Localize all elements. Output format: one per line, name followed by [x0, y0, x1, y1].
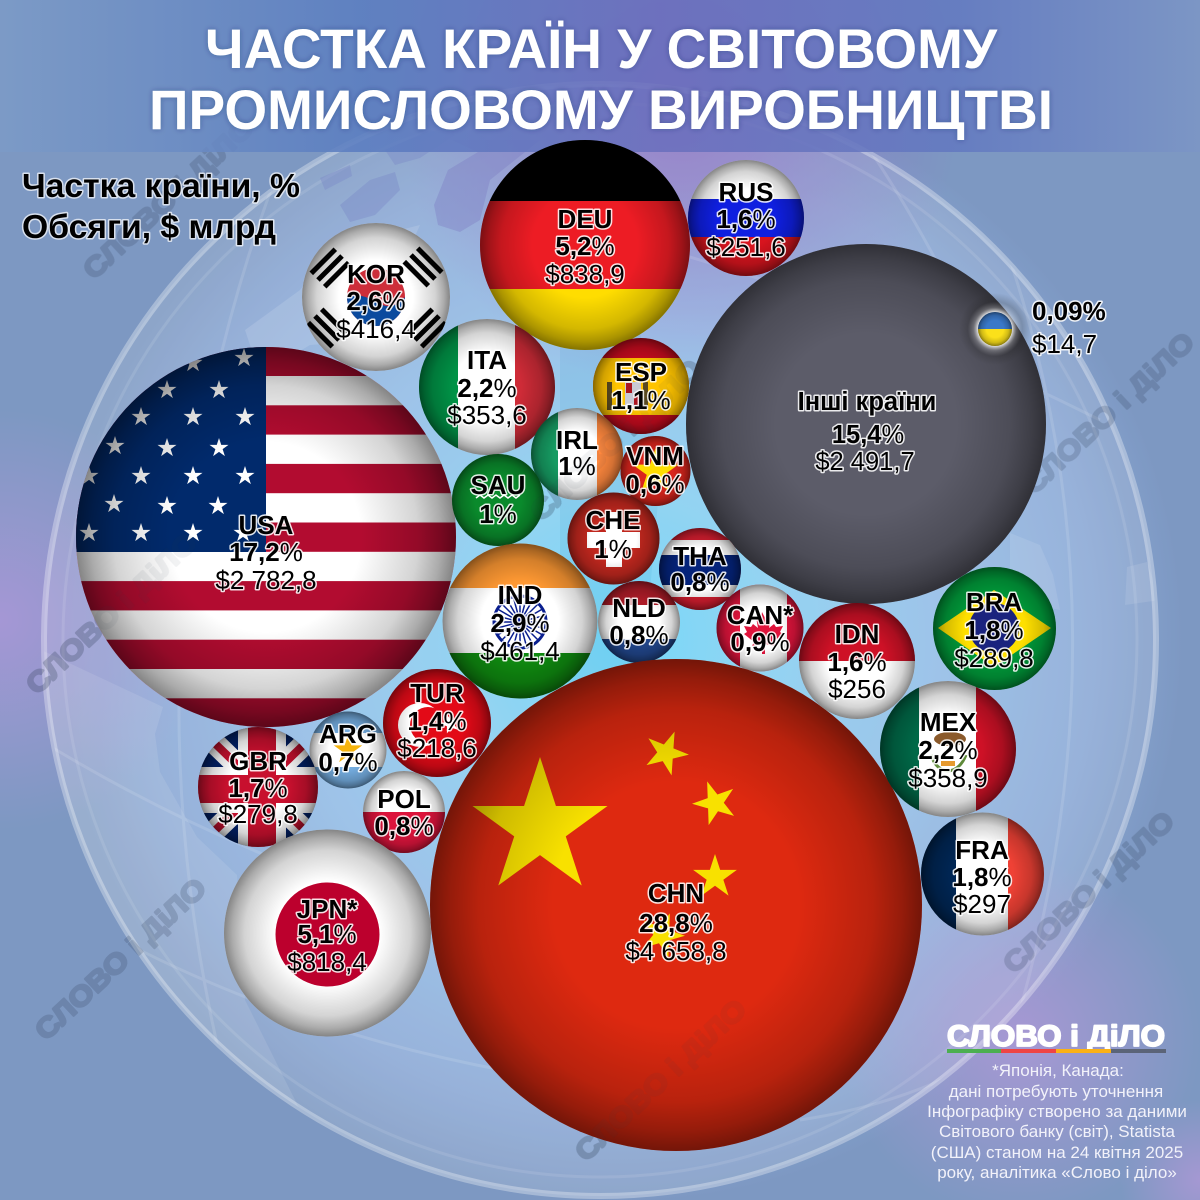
bubble: Thailand — [659, 528, 741, 610]
label: RUS: RUS — [719, 177, 773, 207]
label: MEX: MEX — [920, 707, 977, 737]
label: RUS: 1,6% — [716, 204, 776, 234]
watermarks: СЛОВО і ДіЛО — [997, 805, 1180, 979]
bubble: China — [430, 659, 922, 1151]
footnote and source: року, аналітика «Слово і діло» — [937, 1163, 1177, 1182]
label: IND: IND — [498, 580, 542, 610]
title — [149, 17, 1053, 141]
bubble: Ireland — [531, 408, 624, 500]
watermark overlay on bubbles: СЛОВО і ДіЛО — [524, 353, 707, 527]
label: THA: 0,8% — [670, 567, 730, 597]
label: POL: 0,8% — [374, 811, 434, 841]
label: ITA: $353,6 — [447, 400, 527, 430]
bubble: Mexico — [880, 681, 1016, 817]
label: GBR: $279,8 — [218, 799, 298, 829]
footnote and source: *Японія, Канада: — [992, 1061, 1124, 1080]
watermark overlay on bubbles: СЛОВО і ДіЛО — [569, 993, 752, 1167]
label: USA: 17,2% — [229, 537, 303, 567]
label: BRA: 1,8% — [964, 615, 1024, 645]
bubble: Poland — [363, 771, 445, 854]
label: FRA: FRA — [955, 835, 1009, 865]
label: CHN: $4 658,8 — [625, 936, 727, 966]
bubble: Netherlands — [598, 581, 680, 664]
label: JPN: JPN* — [297, 894, 358, 924]
label: KOR: $416,4 — [336, 314, 416, 344]
logo: Слово і діло: СЛОВО і ДіЛО — [947, 1020, 1165, 1053]
label: NLD: 0,8% — [609, 620, 669, 650]
bubble: Russia — [688, 160, 804, 277]
bubble: France — [921, 812, 1045, 936]
label: THA: THA — [673, 541, 727, 571]
label: TUR: TUR — [410, 678, 464, 708]
label: TUR: 1,4% — [407, 706, 467, 736]
label: TUR: $218,6 — [397, 733, 477, 763]
label: JPN: 5,1% — [297, 919, 357, 949]
header band — [0, 0, 1200, 152]
label: MEX: 2,2% — [918, 735, 978, 765]
label: CHE: CHE — [586, 505, 640, 535]
bubble: South Korea — [302, 223, 450, 371]
label: SAU: SAU — [471, 470, 525, 500]
bubble: Japan — [224, 830, 431, 1036]
bubble: Other countries — [686, 244, 1046, 604]
bubble: USA — [76, 347, 456, 727]
label: ITA: 2,2% — [457, 373, 517, 403]
label: Ukraine: 0,09% — [1032, 296, 1106, 326]
label: IDN: $256 — [828, 674, 886, 704]
label: ESP: 1,1% — [611, 385, 671, 415]
label: CAN: CAN* — [727, 600, 794, 630]
legend: Частка країни, % — [22, 167, 300, 205]
watermarks: СЛОВО і ДіЛО — [524, 353, 707, 527]
label: DEU: $838,9 — [545, 259, 625, 289]
footnote and source: дані потребують уточнення — [949, 1082, 1163, 1101]
label: VNM: VNM — [626, 441, 684, 471]
bubble: Canada — [716, 584, 804, 672]
bubble: Argentina — [309, 711, 388, 790]
bubble: Vietnam — [620, 436, 692, 507]
label: ITA: ITA — [467, 345, 507, 375]
label: CHE: 1% — [594, 534, 632, 564]
label: GBR: GBR — [229, 746, 287, 776]
footnote and source: (США) станом на 24 квітня 2025 — [931, 1143, 1183, 1162]
title: ПРОМИСЛОВОМУ ВИРОБНИЦТВІ — [149, 78, 1053, 141]
label: FRA: $297 — [953, 889, 1011, 919]
label: IDN: 1,6% — [827, 647, 887, 677]
bubble: Switzerland — [567, 492, 660, 585]
label: other countries: 15,4% — [832, 421, 904, 449]
label: IND: 2,9% — [490, 608, 550, 638]
label: JPN: $818,4 — [287, 947, 367, 977]
label: DEU: DEU — [558, 204, 612, 234]
label: SAU: 1% — [479, 499, 517, 529]
footnote and source: Інфографіку створено за даними — [927, 1102, 1187, 1121]
bubble: Ukraine — [965, 294, 1107, 359]
watermark overlay on bubbles: СЛОВО і ДіЛО — [20, 526, 203, 700]
watermarks: СЛОВО і ДіЛО — [569, 993, 752, 1167]
title: ЧАСТКА КРАЇН У СВІТОВОМУ — [205, 17, 998, 80]
legend: Обсяги, $ млрд — [22, 208, 276, 246]
watermarks: СЛОВО і ДіЛО — [77, 111, 260, 285]
label: GBR: 1,7% — [228, 773, 288, 803]
label: NLD: NLD — [612, 593, 666, 623]
bubble: Saudi Arabia — [452, 454, 544, 546]
label: ESP: ESP — [615, 357, 667, 387]
label: FRA: 1,8% — [952, 862, 1012, 892]
label: CHN: CHN — [648, 878, 704, 908]
watermarks: СЛОВО і ДіЛО — [20, 526, 203, 700]
label: RUS: $251,6 — [706, 232, 786, 262]
label: IDN: IDN — [835, 619, 879, 649]
bubble: Italy — [419, 319, 555, 455]
label: KOR: 2,6% — [346, 286, 406, 316]
label: IND: $461,4 — [480, 636, 560, 666]
label: POL: POL — [377, 784, 431, 814]
label: ARG: 0,7% — [318, 747, 378, 777]
label: IRL: IRL — [556, 425, 598, 455]
watermark overlay on bubbles — [20, 353, 752, 1167]
label: KOR: KOR — [347, 259, 405, 289]
label: MEX: $358,9 — [908, 763, 988, 793]
label: Ukraine: $14,7 — [1032, 329, 1097, 359]
watermarks: СЛОВО і ДіЛО — [29, 872, 212, 1046]
label: DEU: 5,2% — [555, 231, 615, 261]
label: BRA: $289,8 — [954, 643, 1034, 673]
label: VNM: 0,6% — [625, 469, 685, 499]
label: USA: USA — [239, 510, 294, 540]
label: other countries: Інші країни — [798, 388, 936, 416]
footnote and source: Світового банку (світ), Statista — [939, 1122, 1176, 1141]
label: USA: $2 782,8 — [215, 565, 317, 595]
label: other countries: $2 491,7 — [815, 448, 915, 476]
label: CHN: 28,8% — [639, 908, 713, 938]
label: BRA: BRA — [966, 587, 1022, 617]
label: IRL: 1% — [558, 451, 596, 481]
label: ARG: ARG — [319, 719, 377, 749]
bubble: Brazil — [933, 567, 1056, 690]
label: CAN: 0,9% — [730, 627, 790, 657]
bubble: Spain — [593, 338, 689, 434]
watermarks: СЛОВО і ДіЛО — [1017, 326, 1200, 500]
bubble: Indonesia — [799, 603, 915, 720]
bubble: Germany — [480, 140, 690, 351]
bubble: Turkey — [383, 668, 492, 778]
bubble: India — [442, 543, 598, 700]
bubble: United Kingdom — [198, 727, 322, 847]
